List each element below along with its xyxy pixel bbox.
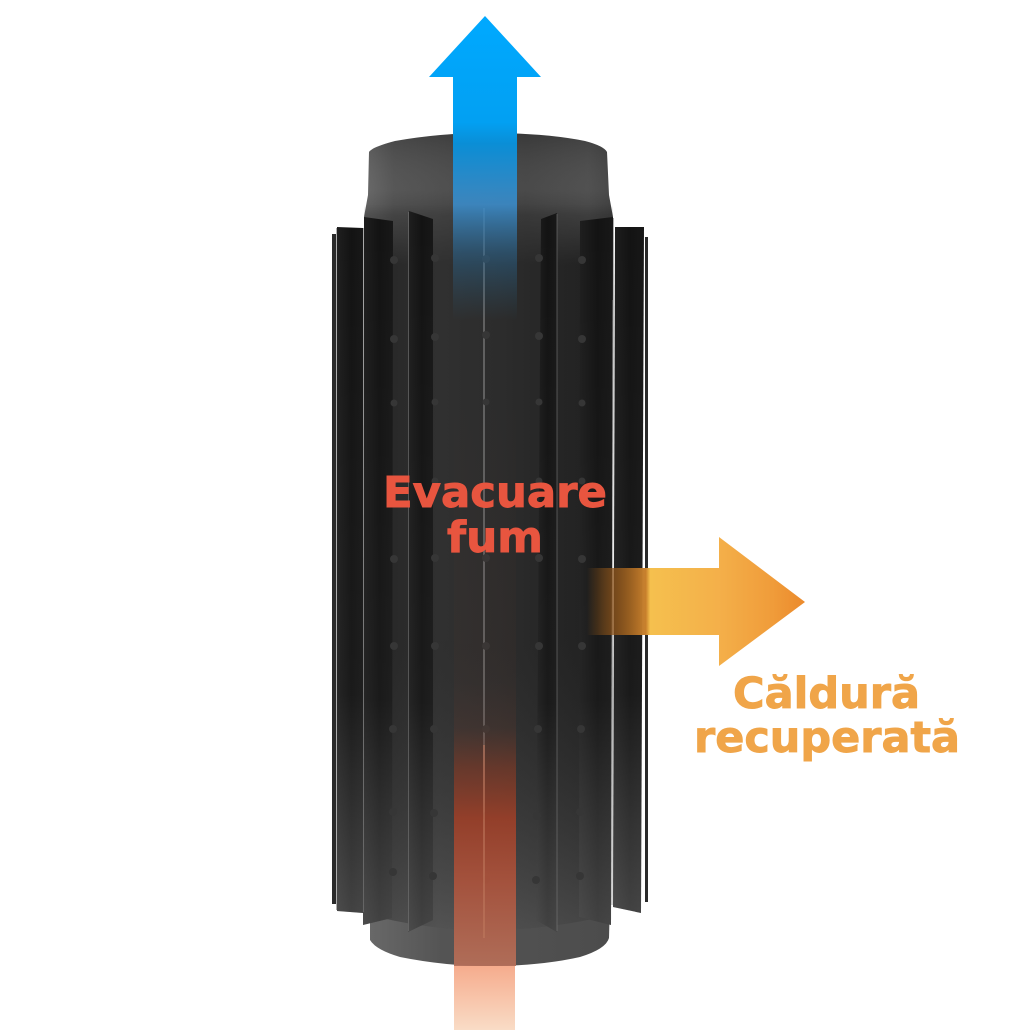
label: Evacuare fum bbox=[383, 468, 607, 563]
arrow: recovered heat, orange bbox=[587, 537, 805, 666]
label: Căldură recuperată: Căldură bbox=[733, 669, 920, 719]
cylinder body bbox=[364, 200, 613, 930]
fins bbox=[332, 208, 648, 938]
bottom collar bbox=[370, 900, 610, 966]
label: Evacuare fum: fum bbox=[447, 513, 543, 563]
label: Evacuare fum: Evacuare bbox=[383, 468, 607, 518]
top collar bbox=[364, 133, 613, 300]
label: Căldură recuperată bbox=[694, 669, 960, 763]
chimney heat recuperator pipe bbox=[332, 133, 648, 966]
rivets bbox=[389, 254, 586, 884]
label: Căldură recuperată: recuperată bbox=[694, 713, 960, 763]
fin edge highlights bbox=[336, 212, 614, 931]
arrow: smoke inflow, red fading up through the pipe bbox=[454, 400, 516, 1030]
center fin line bbox=[483, 208, 485, 938]
arrow: blue smoke exhaust upward bbox=[429, 16, 541, 320]
